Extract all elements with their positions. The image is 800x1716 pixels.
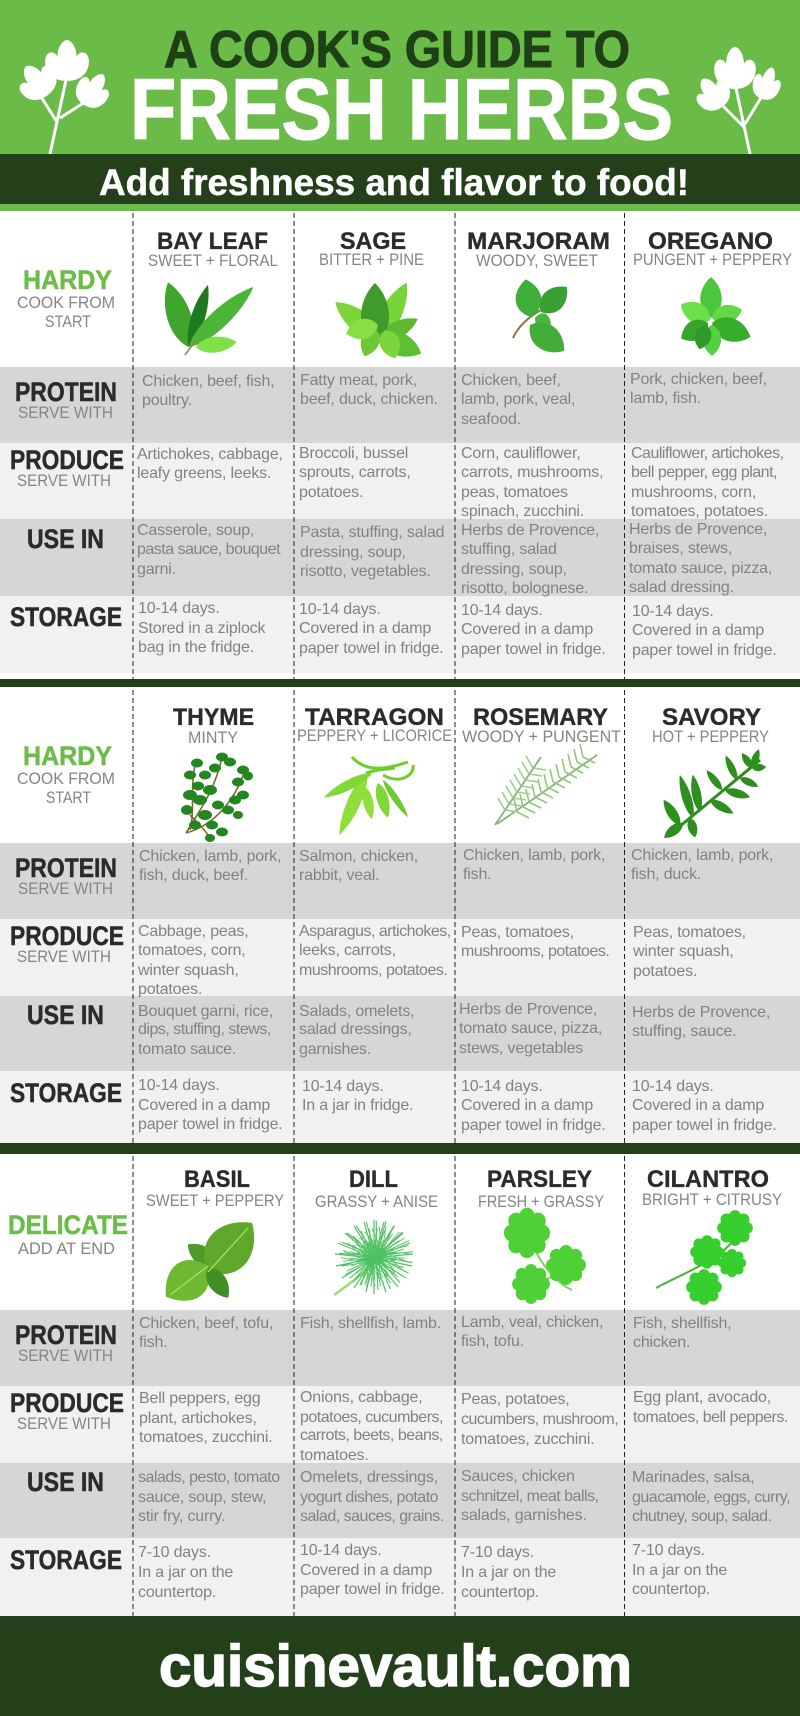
cells: oregano: paper towel in fridge. xyxy=(632,642,777,659)
herb: savory: SAVORY xyxy=(662,704,761,731)
icon: right white flower sprig xyxy=(688,47,785,154)
herb: cilantro xyxy=(642,1166,782,1305)
cells: thyme: tomato sauce. xyxy=(138,1041,236,1058)
herb: basil: SWEET + PEPPERY xyxy=(146,1192,284,1210)
cells: marjoram: dressing, soup, xyxy=(461,561,567,578)
herb: cilantro: CILANTRO xyxy=(647,1166,769,1193)
herb: rosemary: WOODY + PUNGENT xyxy=(462,728,621,746)
herb: cilantro: BRIGHT + CITRUSY xyxy=(642,1191,782,1209)
cells: cilantro: In a jar on the xyxy=(632,1562,727,1579)
cells: parsley: salads, garnishes. xyxy=(461,1507,587,1524)
cells: cilantro: Egg plant, avocado, xyxy=(633,1389,771,1406)
cells: rosemary: stews, vegetables xyxy=(459,1040,583,1057)
cells: basil: Chicken, beef, tofu, xyxy=(139,1315,273,1332)
cells: savory: Herbs de Provence, xyxy=(632,1004,770,1021)
cells: thyme: potatoes. xyxy=(138,981,202,998)
herb: savory: HOT + PEPPERY xyxy=(652,728,769,746)
category label: hardy xyxy=(17,265,115,331)
herb: tarragon: PEPPERY + LICORICE xyxy=(297,727,452,745)
cells: parsley: tomatoes, zucchini. xyxy=(461,1431,595,1448)
cells: oregano: bell pepper, egg plant, xyxy=(631,464,777,481)
cells: tarragon: In a jar in fridge. xyxy=(302,1097,413,1114)
herb: parsley: FRESH + GRASSY xyxy=(478,1193,604,1211)
cells: savory: Covered in a damp xyxy=(632,1097,764,1114)
panel: delicate herbs xyxy=(0,1156,800,1616)
row label: protein third: PROTEIN xyxy=(15,1320,117,1350)
cells: thyme: paper towel in fridge. xyxy=(138,1116,283,1133)
cells: tarragon: mushrooms, potatoes. xyxy=(299,962,447,979)
category label: delicate xyxy=(8,1210,128,1258)
cells: tarragon xyxy=(299,848,451,1114)
row label: storage third: STORAGE xyxy=(10,1545,122,1575)
row label: protein: PROTEIN xyxy=(15,377,117,407)
cells: bay leaf: poultry. xyxy=(142,392,192,409)
cells: sage: risotto, vegetables. xyxy=(300,563,431,580)
row label: protein xyxy=(15,377,117,422)
cells: thyme: Chicken, lamb, pork, xyxy=(139,848,281,865)
cells: oregano: braises, stews, xyxy=(629,540,732,557)
cells: dill: Fish, shellfish, lamb. xyxy=(300,1315,441,1332)
cells: basil: countertop. xyxy=(138,1584,216,1601)
cells: dill: Onions, cabbage, xyxy=(300,1389,423,1406)
cells: tarragon: Asparagus, artichokes, xyxy=(299,923,451,940)
category label: hardy second xyxy=(17,741,115,807)
cells: rosemary xyxy=(459,847,609,1134)
category label: hardy: COOK FROM xyxy=(17,294,115,312)
cells: parsley: 7-10 days. xyxy=(461,1544,534,1561)
row label: protein second xyxy=(15,853,117,898)
category label: hardy: START xyxy=(45,313,91,331)
cells: marjoram: paper towel in fridge. xyxy=(461,641,606,658)
cells: bay leaf: leafy greens, leeks. xyxy=(137,465,271,482)
cells: rosemary: 10-14 days. xyxy=(461,1078,543,1095)
herb: rosemary: ROSEMARY xyxy=(473,704,608,731)
cells: parsley: fish, tofu. xyxy=(461,1333,524,1350)
cells: dill: tomatoes. xyxy=(300,1447,369,1464)
cells: dill: 10-14 days. xyxy=(300,1542,382,1559)
footer: cuisinevault.com xyxy=(159,1634,632,1699)
cells: rosemary: fish. xyxy=(463,866,491,883)
herb: parsley: PARSLEY xyxy=(487,1166,592,1193)
cells: tarragon: rabbit, veal. xyxy=(299,867,379,884)
cells: cilantro: chicken. xyxy=(633,1334,690,1351)
header banner xyxy=(0,0,800,158)
cells: oregano xyxy=(629,371,784,659)
cells: oregano: lamb, fish. xyxy=(630,390,701,407)
cells: marjoram: spinach, zucchini. xyxy=(461,503,584,520)
cells: sage: 10-14 days. xyxy=(299,601,381,618)
row label: produce third xyxy=(10,1388,124,1433)
cells: tarragon: leeks, carrots, xyxy=(299,942,396,959)
cells: oregano: Cauliflower, artichokes, xyxy=(631,445,784,462)
row label: storage: STORAGE xyxy=(10,602,122,632)
cells: parsley xyxy=(461,1314,618,1601)
cells: cilantro: Fish, shellfish, xyxy=(633,1315,732,1332)
row label: protein third: SERVE WITH xyxy=(18,1347,113,1365)
cells: savory: potatoes. xyxy=(633,963,697,980)
cells: marjoram: stuffing, salad xyxy=(461,541,557,558)
cells: savory: Peas, tomatoes, xyxy=(633,924,746,941)
cells: parsley: countertop. xyxy=(461,1584,539,1601)
row label: produce second: PRODUCE xyxy=(10,921,124,951)
cells: bay leaf: Casserole, soup, xyxy=(137,522,254,539)
panel: hardy herbs, first group xyxy=(0,213,800,679)
cells: savory: 10-14 days. xyxy=(632,1078,714,1095)
herb: bay leaf xyxy=(148,228,278,355)
cells: rosemary: Herbs de Provence, xyxy=(459,1001,597,1018)
cells: oregano: salad dressing. xyxy=(629,579,734,596)
cells: bay leaf: Artichokes, cabbage, xyxy=(137,446,283,463)
cells: savory: paper towel in fridge. xyxy=(632,1117,777,1134)
cells: thyme: Bouquet garni, rice, xyxy=(138,1003,273,1020)
title: fresh herbs: FRESH HERBS xyxy=(130,62,673,158)
panel: hardy herbs, second group xyxy=(0,690,800,1143)
cells: rosemary: paper towel in fridge. xyxy=(461,1117,606,1134)
herb: parsley xyxy=(478,1166,604,1304)
cells: rosemary: Covered in a damp xyxy=(461,1097,593,1114)
cells: parsley: Sauces, chicken xyxy=(461,1468,575,1485)
row label: produce: PRODUCE xyxy=(10,445,124,475)
cells: rosemary: Chicken, lamb, pork, xyxy=(463,847,605,864)
row label: use in: USE IN xyxy=(27,524,104,554)
herb: oregano xyxy=(633,228,792,356)
row label: produce second xyxy=(10,921,124,966)
cells: bay leaf: garni. xyxy=(137,561,176,578)
cells: sage xyxy=(299,372,444,657)
cells: dill: yogurt dishes, potato xyxy=(300,1489,439,1506)
cells: sage: Broccoli, bussel xyxy=(299,445,408,462)
cells: cilantro: Marinades, salsa, xyxy=(632,1469,754,1486)
category label: hardy: HARDY xyxy=(23,265,112,295)
herb: dill: DILL xyxy=(349,1166,398,1193)
herb: dill xyxy=(315,1166,438,1299)
cells: sage: sprouts, carrots, xyxy=(299,464,411,481)
cells: tarragon: salad dressings, xyxy=(299,1021,412,1038)
herb: tarragon xyxy=(297,704,452,838)
herb: sage: SAGE xyxy=(340,228,406,255)
cells: marjoram: Corn, cauliflower, xyxy=(461,445,580,462)
herb: sage xyxy=(319,228,426,364)
cells: cilantro: tomatoes, bell peppers. xyxy=(633,1409,788,1426)
cells: sage: paper towel in fridge. xyxy=(299,640,444,657)
cells: cilantro: 7-10 days. xyxy=(632,1542,705,1559)
cells: oregano: Pork, chicken, beef, xyxy=(630,371,767,388)
cells: thyme: Covered in a damp xyxy=(138,1097,270,1114)
herb: basil xyxy=(146,1166,284,1313)
cells: dill: Covered in a damp xyxy=(300,1562,432,1579)
herb: basil: BASIL xyxy=(184,1166,250,1193)
row label: produce third: SERVE WITH xyxy=(17,1415,111,1433)
cells: marjoram: carrots, mushrooms, xyxy=(461,464,603,481)
herb: marjoram: WOODY, SWEET xyxy=(476,252,598,270)
cells: thyme: 10-14 days. xyxy=(138,1077,220,1094)
cells: dill: carrots, beets, beans, xyxy=(300,1427,443,1444)
cells: bay leaf: Chicken, beef, fish, xyxy=(142,373,274,390)
cells: rosemary: mushrooms, potatoes. xyxy=(461,943,609,960)
cells: marjoram: risotto, bolognese. xyxy=(461,580,588,597)
cells: tarragon: 10-14 days. xyxy=(302,1078,384,1095)
herb: marjoram: MARJORAM xyxy=(467,228,610,255)
cells: savory: fish, duck. xyxy=(631,866,701,883)
cells: savory: Chicken, lamb, pork, xyxy=(631,847,773,864)
cells: rosemary: tomato sauce, pizza, xyxy=(459,1020,602,1037)
cells: dill xyxy=(300,1315,445,1598)
herb: thyme: THYME xyxy=(173,704,254,731)
cells: parsley: Lamb, veal, chicken, xyxy=(461,1314,603,1331)
cells: oregano: tomatoes, potatoes. xyxy=(631,503,768,520)
cells: rosemary: Peas, tomatoes, xyxy=(461,924,574,941)
row label: produce second: SERVE WITH xyxy=(17,948,111,966)
row label: storage second: STORAGE xyxy=(10,1078,122,1108)
cells: bay leaf xyxy=(137,373,283,656)
cells: cilantro: guacamole, eggs, curry, xyxy=(632,1489,790,1506)
herb: sage: BITTER + PINE xyxy=(319,251,424,269)
cells: parsley: schnitzel, meat balls, xyxy=(461,1488,599,1505)
cells: savory: stuffing, sauce. xyxy=(632,1023,736,1040)
row label: produce third: PRODUCE xyxy=(10,1388,124,1418)
category label: hardy second: HARDY xyxy=(23,741,112,771)
cells: bay leaf: 10-14 days. xyxy=(138,600,220,617)
herb: thyme: MINTY xyxy=(188,729,238,747)
cells: thyme: dips, stuffing, stews, xyxy=(138,1021,271,1038)
cells: oregano: tomato sauce, pizza, xyxy=(629,560,772,577)
cells: sage: Fatty meat, pork, xyxy=(300,372,417,389)
cells: basil: tomatoes, zucchini. xyxy=(139,1429,273,1446)
cells: tarragon: Salads, omelets, xyxy=(299,1003,414,1020)
cells: bay leaf: Stored in a ziplock xyxy=(138,620,266,637)
cells: basil: salads, pesto, tomato xyxy=(138,1469,280,1486)
title: a cook's guide to: A COOK'S GUIDE TO xyxy=(164,21,630,79)
cells: dill: salad, sauces, grains. xyxy=(300,1508,444,1525)
herb: dill: GRASSY + ANISE xyxy=(315,1193,438,1211)
subtitle band xyxy=(0,154,800,211)
herb: tarragon: TARRAGON xyxy=(305,704,444,731)
cells: thyme: fish, duck, beef. xyxy=(139,867,248,884)
cells: marjoram: peas, tomatoes xyxy=(461,484,568,501)
cells: marjoram xyxy=(461,372,606,658)
cells: thyme: Cabbage, peas, xyxy=(138,923,248,940)
cells: oregano: mushrooms, corn, xyxy=(631,484,756,501)
cells: oregano: Herbs de Provence, xyxy=(629,521,767,538)
herb: bay leaf: SWEET + FLORAL xyxy=(148,252,278,270)
cells: sage: Pasta, stuffing, salad xyxy=(300,524,444,541)
cells: sage: potatoes. xyxy=(299,484,363,501)
cells: basil: stir fry, curry. xyxy=(138,1508,225,1525)
cells: marjoram: 10-14 days. xyxy=(461,602,543,619)
cells: thyme: tomatoes, corn, xyxy=(138,942,246,959)
row label: use in third: USE IN xyxy=(27,1467,104,1497)
cells: basil: sauce, soup, stew, xyxy=(138,1489,266,1506)
cells: bay leaf: pasta sauce, bouquet xyxy=(137,541,281,558)
herb: oregano: OREGANO xyxy=(648,228,773,255)
icon: left white flower sprig xyxy=(10,40,117,154)
cells: sage: Covered in a damp xyxy=(299,620,431,637)
cells: thyme: winter squash, xyxy=(137,962,239,979)
cells: bay leaf: bag in the fridge. xyxy=(138,639,254,656)
row label: protein third xyxy=(15,1320,117,1365)
cells: tarragon: garnishes. xyxy=(299,1041,371,1058)
herb: thyme xyxy=(173,704,254,842)
cells: sage: dressing, soup, xyxy=(300,544,406,561)
herb: marjoram xyxy=(467,228,610,361)
cells: cilantro: countertop. xyxy=(632,1581,710,1598)
cells: marjoram: Chicken, beef, xyxy=(461,372,561,389)
cells: dill: Omelets, dressings, xyxy=(300,1469,438,1486)
cells: basil: 7-10 days. xyxy=(138,1544,211,1561)
cells: parsley: In a jar on the xyxy=(461,1564,556,1581)
category label: hardy second: START xyxy=(46,789,91,807)
category label: hardy second: COOK FROM xyxy=(17,770,115,788)
cells: dill: potatoes, cucumbers, xyxy=(300,1409,443,1426)
cells: basil xyxy=(138,1315,280,1601)
herb: savory xyxy=(652,704,769,842)
cells: thyme xyxy=(137,848,283,1133)
cells: dill: paper towel in fridge. xyxy=(300,1581,445,1598)
row label: use in second: USE IN xyxy=(27,1000,104,1030)
cells: marjoram: Herbs de Provence, xyxy=(461,522,599,539)
cells: sage: beef, duck, chicken. xyxy=(300,391,438,408)
cells: cilantro: chutney, soup, salad. xyxy=(632,1508,772,1525)
footer xyxy=(0,1616,800,1716)
row label: protein second: SERVE WITH xyxy=(18,880,113,898)
row label: produce: SERVE WITH xyxy=(17,472,111,490)
cells: marjoram: lamb, pork, veal, xyxy=(461,391,575,408)
herb: rosemary xyxy=(462,704,621,825)
cells: marjoram: seafood. xyxy=(461,411,521,428)
cells: basil: Bell peppers, egg xyxy=(139,1390,260,1407)
cells: parsley: Peas, potatoes, xyxy=(461,1391,570,1408)
herb: bay leaf: BAY LEAF xyxy=(157,228,268,255)
row label: protein second: PROTEIN xyxy=(15,853,117,883)
subtitle band: Add freshness and flavor to food! xyxy=(99,162,689,203)
cells: oregano: 10-14 days. xyxy=(632,603,714,620)
category label: delicate: DELICATE xyxy=(8,1210,128,1240)
cells: oregano: Covered in a damp xyxy=(632,622,764,639)
cells: savory: winter squash, xyxy=(632,943,734,960)
cells: cilantro xyxy=(632,1315,790,1598)
category label: delicate: ADD AT END xyxy=(18,1240,115,1258)
row label: protein: SERVE WITH xyxy=(18,404,113,422)
cells: savory xyxy=(631,847,777,1134)
cells: parsley: cucumbers, mushroom, xyxy=(461,1411,618,1428)
cells: tarragon: Salmon, chicken, xyxy=(299,848,418,865)
cells: basil: In a jar on the xyxy=(138,1564,233,1581)
cells: basil: plant, artichokes, xyxy=(139,1410,257,1427)
cells: basil: fish. xyxy=(139,1334,167,1351)
row label: produce xyxy=(10,445,124,490)
cells: marjoram: Covered in a damp xyxy=(461,621,593,638)
